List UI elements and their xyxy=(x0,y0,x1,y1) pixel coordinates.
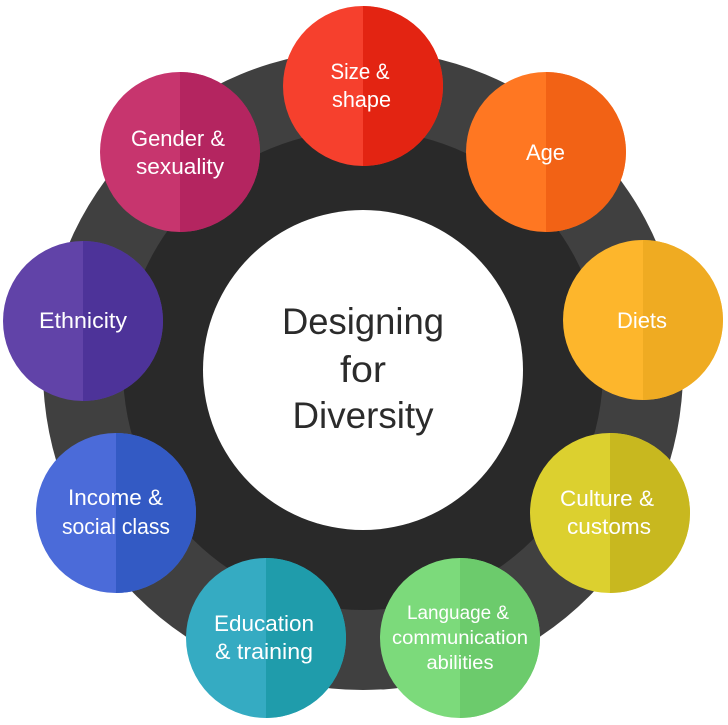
circle: Size & shape: shape xyxy=(332,87,391,112)
circle: Ethnicity: Ethnicity xyxy=(39,308,127,333)
circle: Language & communication abilities: abilities xyxy=(426,653,494,674)
circle: Diets: Diets xyxy=(617,308,667,333)
circle: Culture & customs: Culture & xyxy=(560,486,654,511)
circle: Age: Age xyxy=(526,140,565,165)
circle: Gender & sexuality: Gender & xyxy=(131,126,225,151)
circle: Gender & sexuality xyxy=(100,70,260,235)
circle: Income & social class: social class xyxy=(62,514,170,539)
center white circle with title xyxy=(203,210,523,530)
circle: Age xyxy=(466,70,626,235)
circle: Language & communication abilities: Language & xyxy=(407,603,509,624)
inner dark ring xyxy=(123,130,603,610)
circle: Ethnicity xyxy=(3,239,163,404)
outer grey ring xyxy=(43,50,683,690)
circle: Culture & customs: customs xyxy=(567,514,651,539)
circle: Education & training: Education xyxy=(214,611,314,636)
circle: Income & social class: Income & xyxy=(68,485,163,510)
circle: Language & communication abilities xyxy=(380,556,540,721)
title: Designing for Diversity: Designing xyxy=(282,301,444,342)
circle: Income & social class xyxy=(36,431,196,596)
circle: Culture & customs xyxy=(530,431,690,596)
title: Designing for Diversity xyxy=(282,301,444,436)
circle: Size & shape xyxy=(283,0,443,170)
title: Designing for Diversity: Diversity xyxy=(292,395,434,436)
circle: Gender & sexuality: sexuality xyxy=(136,154,224,179)
circle: Language & communication abilities: communication xyxy=(392,628,528,649)
circle: Diets xyxy=(563,238,723,403)
circle: Education & training xyxy=(186,556,346,721)
circle: Education & training: & training xyxy=(215,639,313,664)
title: Designing for Diversity: for xyxy=(340,349,386,390)
circle: Size & shape: Size & xyxy=(330,59,390,84)
